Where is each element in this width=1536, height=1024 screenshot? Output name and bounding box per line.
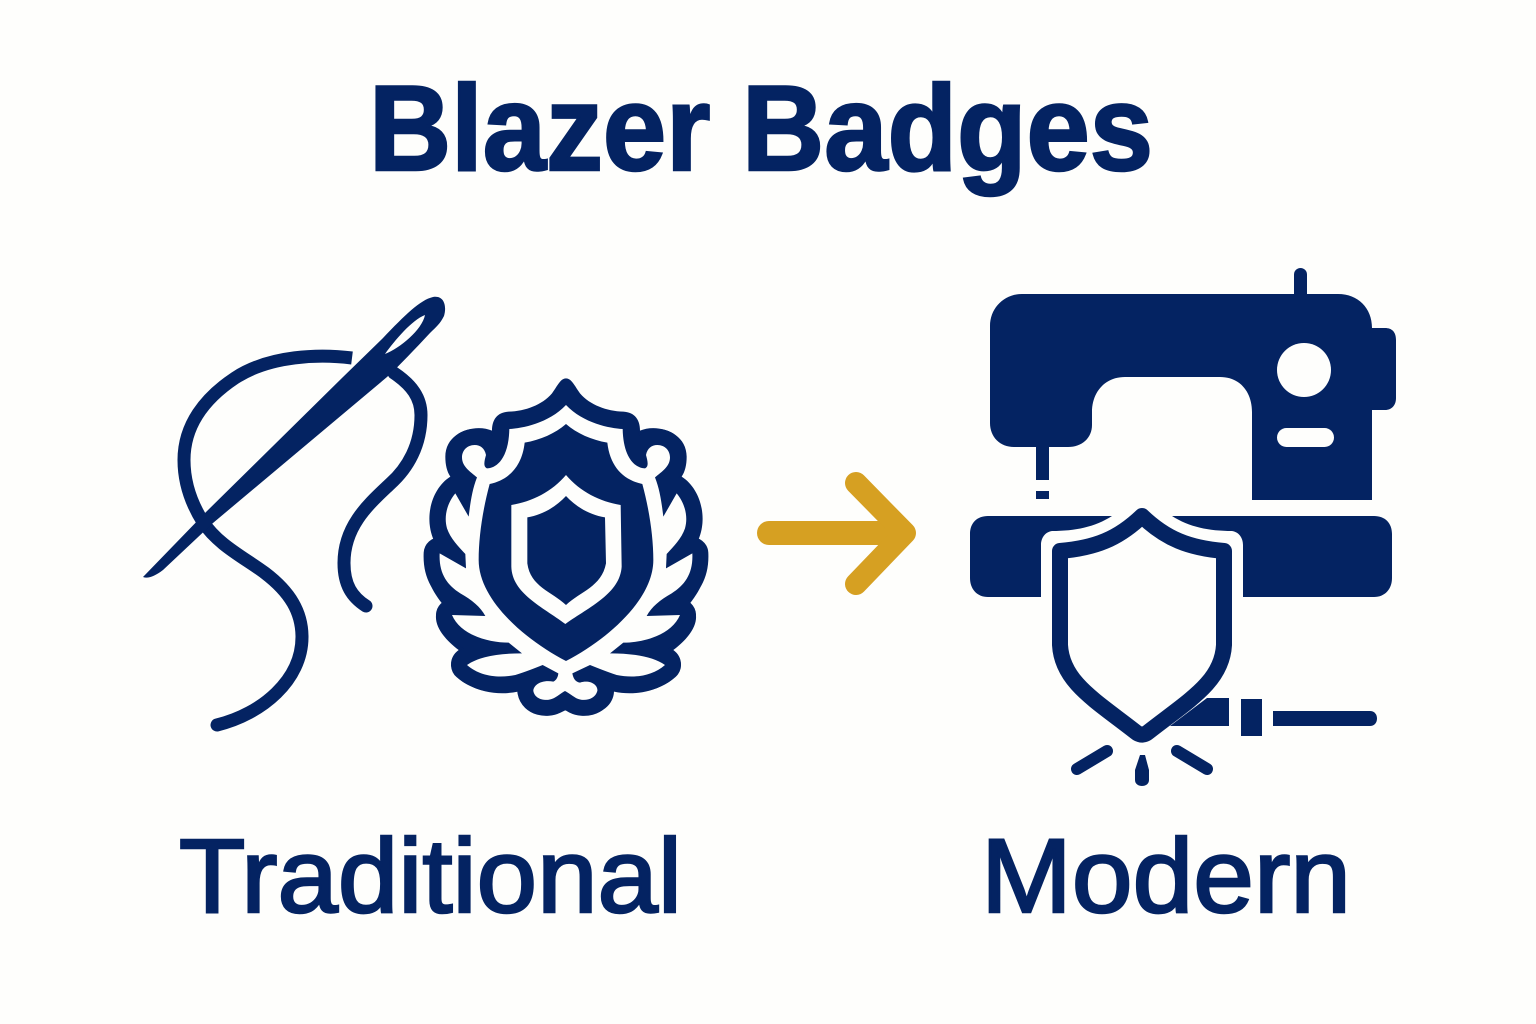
needle: [1036, 447, 1049, 480]
crest shield: [479, 424, 653, 661]
crest inner shield outline: [511, 475, 622, 624]
control slot: [1277, 428, 1334, 447]
thread line: [1273, 711, 1377, 726]
thread stub: [1170, 698, 1229, 726]
sparks: [1077, 751, 1207, 786]
machine body: [990, 294, 1396, 500]
label: Modern: Modern: [981, 818, 1351, 935]
icon: crest badge: [425, 378, 707, 715]
title: Blazer Badges: [369, 60, 1153, 196]
thread spool block: [1241, 699, 1262, 736]
label: Traditional: Traditional: [179, 818, 682, 935]
icon: needle and thread: [143, 297, 445, 725]
spool pin: [1294, 268, 1307, 302]
crest white interior with leaves and thick outline: [440, 405, 692, 700]
icon: sewing machine: [970, 268, 1396, 786]
arrow: [769, 483, 905, 584]
crest inner shield: [527, 496, 606, 605]
machine bed: [970, 516, 1392, 597]
handwheel: [1277, 343, 1331, 397]
crest outer silhouette: [425, 378, 707, 715]
shield outline: [1060, 516, 1224, 734]
